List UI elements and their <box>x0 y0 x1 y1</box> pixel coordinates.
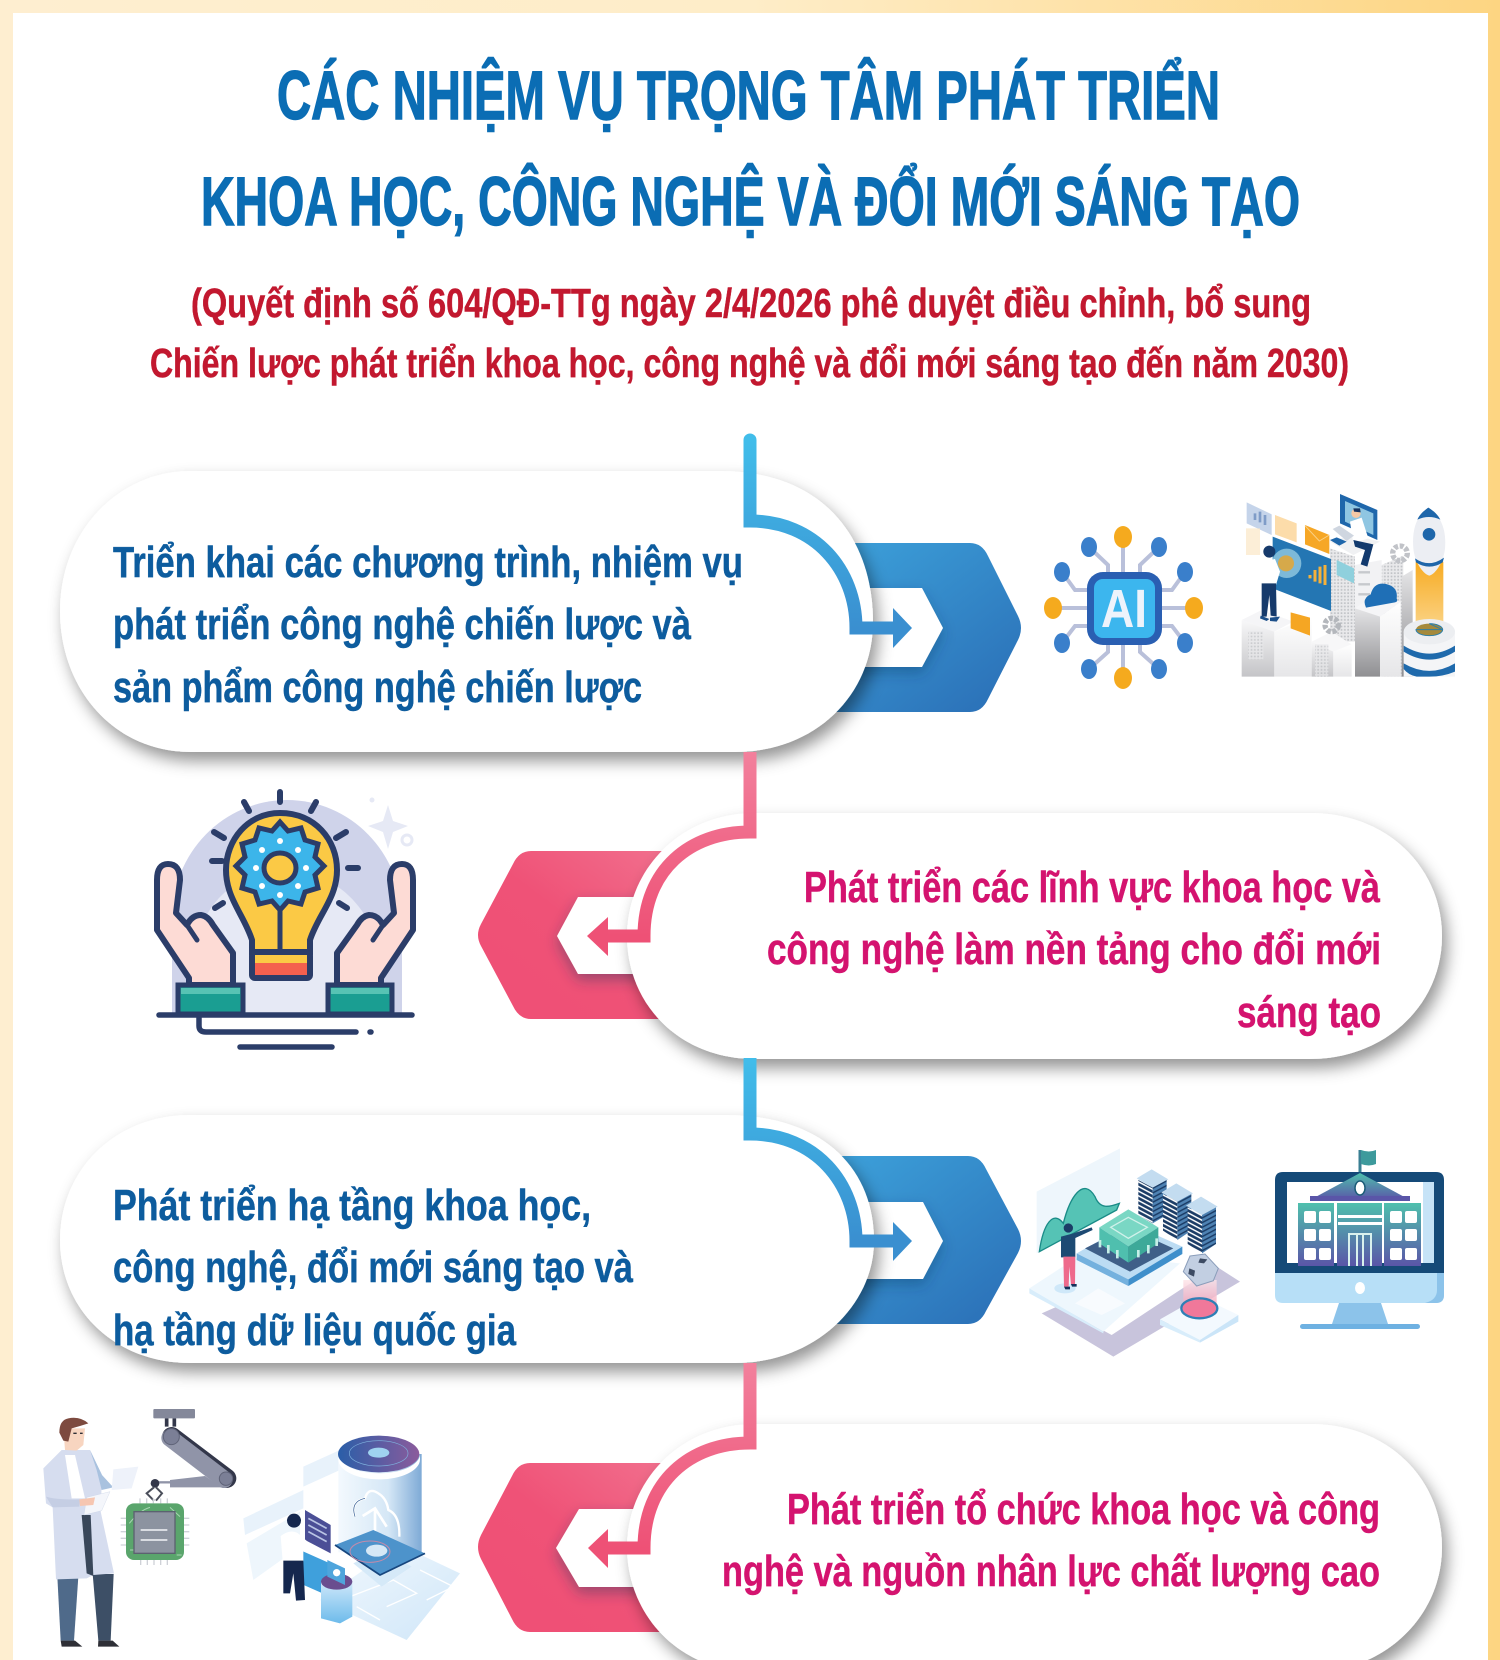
card 3 text <box>113 1181 633 1355</box>
glass capsule with cube <box>1181 1254 1218 1318</box>
circuit floor <box>320 1545 460 1640</box>
connector arrow 1 <box>750 440 912 648</box>
robot arm <box>147 1409 233 1501</box>
scientist <box>43 1418 138 1647</box>
processor chip <box>121 1498 189 1565</box>
hexagon arrow block 3 <box>800 1156 1021 1324</box>
gears <box>1325 546 1407 632</box>
icon: cloud data cylinder <box>243 1436 460 1640</box>
seated person at desk <box>1330 494 1380 567</box>
icon: isometric data infrastructure <box>1029 1148 1240 1357</box>
panel: task 1 <box>60 440 1021 752</box>
card 2 text <box>767 863 1381 1037</box>
person at touch panel <box>281 1510 331 1601</box>
card 1 text: sản phẩm công nghệ chiến lược <box>113 663 642 712</box>
person pointing <box>1054 1223 1093 1293</box>
chip on platform <box>1077 1209 1182 1286</box>
card 1 text <box>113 538 743 712</box>
person at screen <box>1260 546 1280 622</box>
floating panels and main screen <box>1246 502 1370 611</box>
icon: AI chip: AI <box>1101 579 1147 639</box>
cylinder <box>338 1436 422 1552</box>
rocket and data cylinder <box>1404 508 1455 677</box>
panel: task 3 <box>60 1058 1021 1363</box>
card 1 <box>60 471 873 752</box>
folder <box>1291 612 1310 636</box>
hexagon arrow block 1 <box>800 543 1021 712</box>
card 2 text: sáng tạo <box>1237 988 1381 1037</box>
connector arrow 4 <box>588 1363 750 1568</box>
hexagon arrow block 4 <box>478 1463 700 1632</box>
title <box>201 57 1300 240</box>
icon: school on computer monitor <box>1275 1150 1444 1329</box>
card 4 <box>627 1424 1442 1660</box>
panel: task 2 <box>478 752 1442 1059</box>
icon: technology city and rocket <box>1242 494 1455 677</box>
subtitle <box>150 280 1349 386</box>
connector arrow 2 <box>587 752 750 956</box>
cylinder base <box>335 1530 425 1587</box>
card 3 text: công nghệ, đổi mới sáng tạo và <box>113 1243 633 1292</box>
cloud <box>1365 584 1397 608</box>
icon: AI chip <box>1044 526 1203 689</box>
card 1 text: Triển khai các chương trình, nhiệm vụ <box>113 538 743 587</box>
card 1 text: phát triển công nghệ chiến lược và <box>113 600 691 649</box>
card 2 <box>627 813 1442 1059</box>
panel: task 4 <box>478 1363 1442 1660</box>
card 3 text: Phát triển hạ tầng khoa học, <box>113 1181 591 1230</box>
icon: hands holding light bulb <box>157 792 413 1047</box>
pedestal with tablet <box>321 1560 352 1623</box>
card 4 text <box>722 1485 1380 1596</box>
card 3 text: hạ tầng dữ liệu quốc gia <box>113 1306 516 1355</box>
hexagon arrow block 2 <box>478 851 700 1019</box>
card 3 <box>60 1115 874 1363</box>
icon: scientist with robot arm <box>43 1409 233 1647</box>
server towers <box>1137 1169 1218 1253</box>
connector arrow 3 <box>750 1058 912 1261</box>
